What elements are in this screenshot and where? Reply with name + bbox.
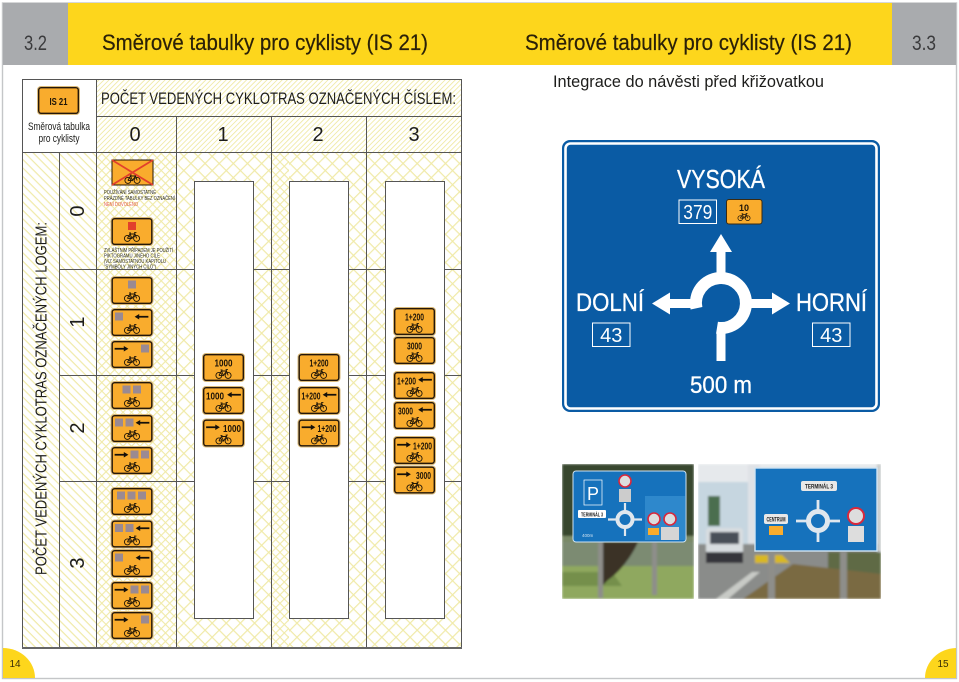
number signs: three numbered routes: 3000: [407, 342, 422, 352]
destination: Horní: HORNÍ: [796, 288, 867, 317]
number signs: two numbered routes: [298, 353, 340, 448]
column numbers: [129, 124, 420, 146]
sign: IS 21: IS 21: [50, 97, 68, 108]
section number right: 3.3: [912, 32, 936, 55]
row numbers: 0: [67, 205, 89, 217]
column numbers: 0: [129, 124, 141, 146]
page number right: [925, 648, 956, 678]
column numbers: 3: [408, 124, 420, 146]
caption: sign name: Směrová tabulka: [28, 121, 91, 133]
note: not allowed: [104, 188, 175, 208]
photo: sign at tree: [562, 464, 694, 599]
heading left: Směrové tabulky pro cyklisty (IS 21): [102, 30, 428, 55]
road number 43 right: [812, 323, 850, 347]
white column count 3: [386, 182, 444, 618]
destination: Dolní: DOLNÍ: [576, 288, 644, 317]
cycle route sign 10: 10: [739, 203, 749, 213]
caption: sign name: pro cyklisty: [38, 133, 80, 145]
number signs: three numbered routes: 1+200: [413, 442, 432, 452]
number signs: three numbered routes: 3000: [416, 471, 431, 482]
heading right: Směrové tabulky pro cyklisty (IS 21): [525, 30, 852, 55]
logo signs: one route: [110, 276, 154, 369]
number signs: three numbered routes: 3000: [398, 406, 413, 418]
number signs: two numbered routes: 1+200: [302, 392, 321, 402]
photo: sign at tree: 400m: [582, 533, 594, 538]
sign: crossed empty sign: [112, 160, 153, 185]
number signs: one numbered route: 1000: [223, 424, 241, 435]
table row heading: POČET VEDENÝCH CYKLOTRAS OZNAČENÝCH LOGEM:: [32, 222, 50, 575]
road number 43 right: 43: [820, 325, 842, 347]
number signs: one numbered route: 1000: [214, 358, 233, 370]
roundabout diagram: [652, 234, 790, 361]
note: not allowed: PRÁZDNÉ TABULKY BEZ OZNAČENÍ: [104, 195, 175, 202]
sign: red square pictogram: [110, 217, 154, 246]
page number right: 15: [937, 659, 949, 670]
cycle route sign 10: [726, 200, 762, 224]
sign: IS 21: [37, 86, 80, 115]
number signs: two numbered routes: 1+200: [310, 358, 329, 370]
note: not allowed: POUŽÍVÁNÍ SAMOSTATNÉ: [104, 188, 157, 196]
caption: sign name: [28, 121, 91, 145]
road number 43 left: 43: [600, 325, 622, 347]
column numbers: 1: [217, 124, 229, 146]
note: special case: ZVLÁŠTNÍM PŘÍPADEM JE POUŽITÍ: [104, 246, 174, 254]
white column count 2: [290, 182, 348, 618]
page number left: 14: [9, 659, 21, 670]
number signs: one numbered route: 1000: [206, 392, 224, 402]
photo: sign at tree: TERMINÁL 3: [581, 512, 603, 518]
note: not allowed: NENÍ DOVOLENO: [104, 201, 138, 208]
number signs: three numbered routes: [393, 307, 436, 494]
road number 43 left: [592, 323, 630, 347]
row numbers: 2: [67, 422, 89, 434]
section number left: 3.2: [24, 32, 47, 55]
photo: sign by road: TERMINÁL 3: [805, 484, 834, 490]
white column count 1: [194, 182, 254, 618]
table column heading: POČET VEDENÝCH CYKLOTRAS OZNAČENÝCH ČÍSLEM:: [101, 89, 456, 108]
photo: sign by road: CENTRUM: [766, 518, 786, 524]
note: special case: "SYMBOLY JINÝCH CÍLŮ"): [104, 264, 156, 270]
row numbers: 3: [67, 557, 89, 569]
logo signs: three routes: [110, 487, 154, 640]
number signs: three numbered routes: 1+200: [405, 312, 424, 324]
number signs: one numbered route: [202, 353, 245, 448]
number signs: three numbered routes: 1+200: [397, 376, 416, 388]
column numbers: 2: [312, 124, 324, 146]
header band: [3, 3, 956, 65]
logo signs: two routes: [110, 381, 154, 475]
note: special case: [104, 246, 174, 270]
row numbers: 1: [67, 316, 89, 328]
page number left: [3, 648, 35, 678]
panel: blue direction sign: [562, 140, 880, 412]
panel: sign matrix table: [22, 79, 462, 649]
photo: sign at tree: P: [587, 484, 599, 504]
destination: Vysoká: VYSOKÁ: [677, 164, 766, 194]
distance: 500 m: [690, 372, 752, 399]
photo: sign by road: [698, 464, 881, 599]
road number 379: 379: [683, 202, 712, 224]
subheading right page: Integrace do návěsti před křižovatkou: [553, 72, 824, 91]
number signs: two numbered routes: 1+200: [318, 424, 337, 435]
note: special case: (VIZ SAMOSTATNOU KAPITOLU: [104, 259, 166, 265]
row numbers: [67, 205, 89, 569]
note: special case: PIKTOGRAMU JINÉHO CÍLE: [104, 252, 161, 260]
